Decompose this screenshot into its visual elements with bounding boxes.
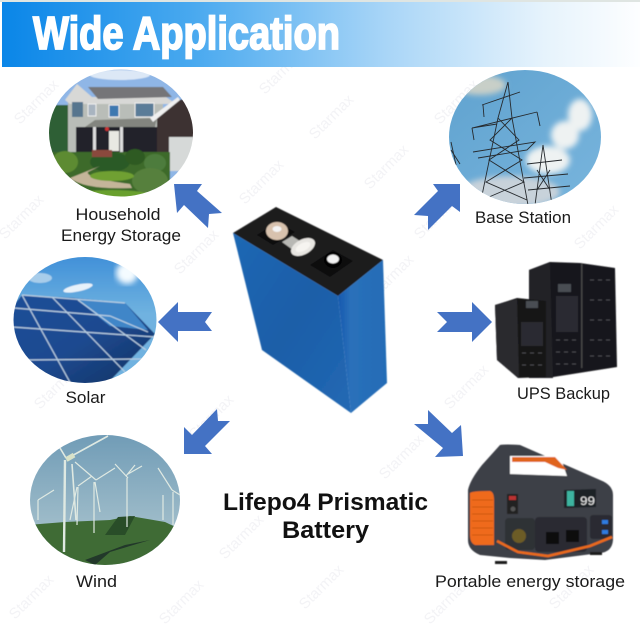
label: ups: UPS Backup (517, 384, 610, 403)
battery terminals (257, 222, 353, 277)
arrow: to household (174, 184, 222, 228)
arrow: to wind (184, 409, 230, 454)
title: Wide Application (33, 7, 340, 59)
watermarks: Starmax (411, 191, 463, 243)
watermarks: Starmax (31, 361, 83, 413)
photo: wind turbines (28, 432, 183, 570)
watermarks: Starmax (11, 76, 63, 128)
battery left face (233, 233, 351, 413)
icon: portable power station: 99 (580, 494, 595, 508)
watermarks: Starmax (6, 571, 58, 623)
watermarks: Starmax (571, 201, 623, 253)
arrow: to ups (437, 302, 492, 342)
header banner (2, 2, 640, 67)
watermarks: Starmax (236, 156, 288, 208)
label: household: Energy Storage (61, 226, 181, 245)
watermarks: Starmax (361, 141, 413, 193)
heading: product name (223, 489, 428, 544)
photo: solar panels (10, 254, 160, 386)
watermarks: Starmax (216, 511, 268, 563)
watermarks: Starmax (421, 576, 473, 628)
watermarks: Starmax (156, 576, 208, 628)
watermarks: Starmax (306, 91, 358, 143)
heading: product name: Lifepo4 Prismatic (223, 489, 428, 516)
icon: portable power station (468, 444, 613, 564)
label: wind: Wind (76, 572, 117, 591)
watermarks: Starmax (296, 561, 348, 613)
label: household: Household (76, 205, 160, 224)
icon: ups cabinets (495, 262, 617, 378)
watermarks: Starmax (376, 431, 428, 483)
label: solar: Solar (66, 388, 106, 407)
battery top face (233, 207, 383, 296)
watermarks: Starmax (431, 76, 483, 128)
heading: product name: Battery (282, 517, 370, 544)
battery right face (338, 260, 387, 413)
arrow: to solar (158, 302, 212, 342)
arrow: to base station (414, 184, 460, 230)
label: portable storage: Portable energy storage (435, 572, 625, 591)
watermarks: Starmax (546, 561, 598, 613)
watermarks: Starmax (171, 226, 223, 278)
watermarks: Starmax (256, 46, 308, 98)
photo: power towers (449, 70, 601, 204)
battery (233, 207, 387, 413)
photo: house (49, 70, 193, 196)
watermarks: Starmax (366, 251, 418, 303)
label: household (61, 205, 181, 245)
watermarks: Starmax (441, 361, 493, 413)
arrow: to portable storage (414, 410, 463, 457)
label: base station: Base Station (475, 208, 571, 227)
watermarks: Starmax (186, 391, 238, 443)
